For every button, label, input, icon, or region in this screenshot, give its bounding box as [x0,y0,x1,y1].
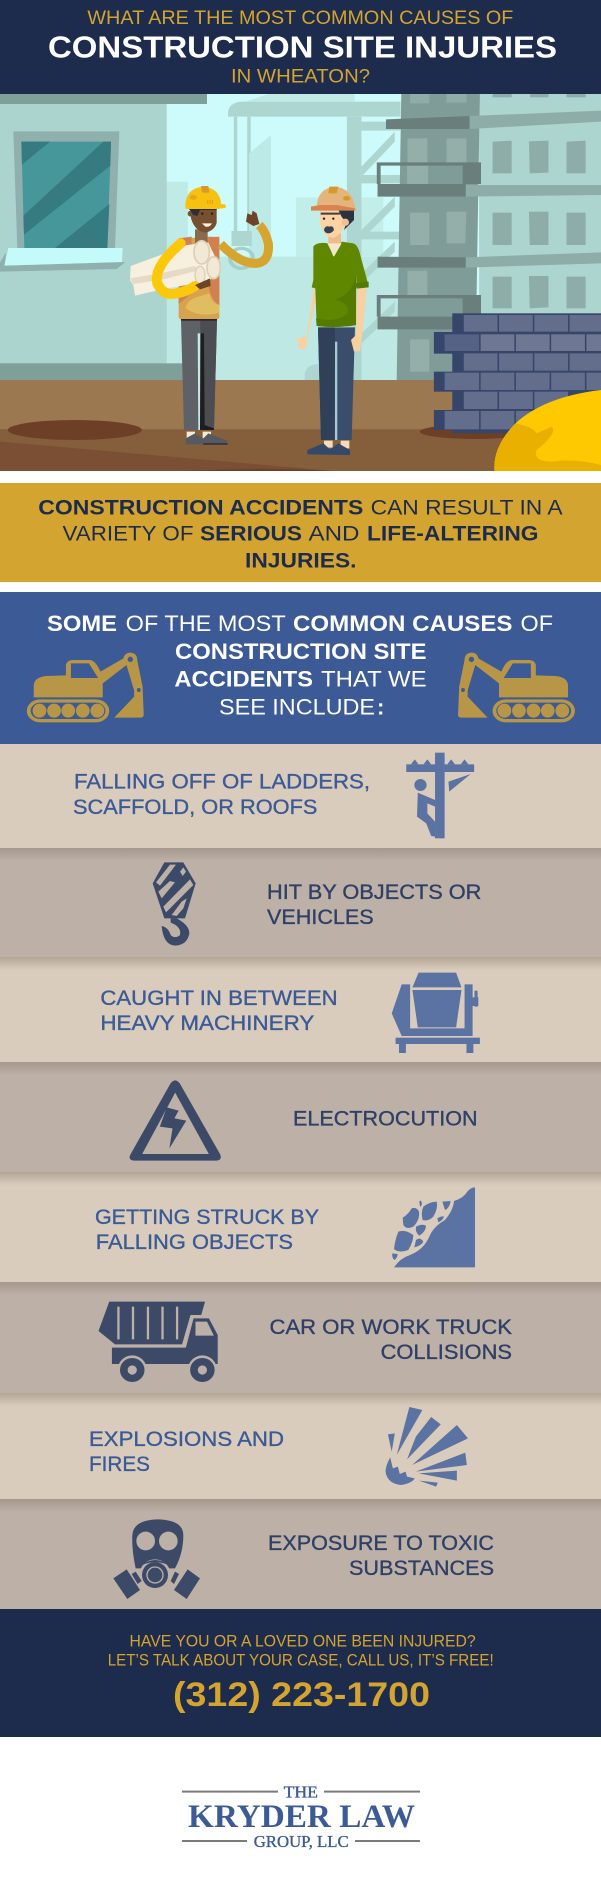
icon: electrical hazard triangle [130,1080,221,1161]
intro banner: gold: CONSTRUCTION ACCIDENTS [38,495,363,519]
panel: caught in machinery: HEAVY MACHINERY [100,1012,314,1035]
icon: crane hook [153,862,196,946]
section heading panel: blue: CONSTRUCTION SITE [175,639,426,664]
call to action footer: LET’S TALK ABOUT YOUR CASE, CALL US, IT’S FREE! [108,1652,494,1670]
call to action footer [0,1609,601,1737]
illustration: worker in green sweater [297,187,369,455]
panel: falling objects: FALLING OBJECTS [96,1231,293,1254]
panel: toxic substances: EXPOSURE TO TOXIC [268,1532,494,1555]
section heading panel: blue: SEE INCLUDE [219,694,375,719]
section heading panel: blue: : [377,694,384,719]
panel: falling off ladders: SCAFFOLD, OR ROOFS [73,796,317,819]
logo: The Kryder Law Group, LLC [182,1783,420,1851]
panel: toxic substances [0,1499,601,1609]
intro banner: gold: CAN RESULT IN A [371,495,563,519]
section heading panel: blue: COMMON CAUSES [293,611,512,636]
header: title [0,0,601,94]
panel: electrocution: ELECTROCUTION [293,1108,478,1131]
panel: truck collisions: COLLISIONS [381,1341,512,1364]
brick stack [434,313,601,433]
intro banner: gold: INJURIES. [245,549,356,573]
panel: falling off ladders: FALLING OFF OF LADDERS, [74,770,370,793]
logo: The Kryder Law Group, LLC: KRYDER LAW [188,1799,415,1835]
section heading panel: blue: SOME [47,611,117,636]
logo: The Kryder Law Group, LLC: THE [284,1783,318,1802]
panel: hit by objects: HIT BY OBJECTS OR [267,881,481,904]
icon: explosion burst [386,1407,468,1487]
icon: gas mask [113,1519,200,1599]
intro banner: gold: VARIETY OF [62,522,194,546]
ground [0,380,507,471]
icon: excavator left [29,653,144,721]
logo: The Kryder Law Group, LLC: GROUP, LLC [254,1832,349,1851]
section heading panel: blue: THAT WE [321,667,427,692]
panel: explosions and fires: EXPLOSIONS AND [89,1428,284,1451]
icon: dump truck [99,1302,218,1385]
sand pile [494,390,601,471]
call to action footer: (312) 223-1700 [173,1676,430,1714]
intro banner: gold: AND [308,522,360,546]
illustration: worker with hard hat and blueprints [130,186,269,445]
intro banner: gold [0,483,601,582]
header: title: CONSTRUCTION SITE INJURIES [48,29,557,64]
panel: truck collisions [0,1282,601,1393]
background crane and city [165,94,402,380]
panel: falling objects [0,1172,601,1282]
header: title: WHAT ARE THE MOST COMMON CAUSES OF [87,7,513,29]
illustration: building window [0,131,125,272]
icon: cement mixer [392,973,480,1053]
panel: caught in machinery [0,957,601,1062]
panel: hit by objects: VEHICLES [267,906,374,929]
panel: electrocution [0,1062,601,1172]
call to action footer: HAVE YOU OR A LOVED ONE BEEN INJURED? [130,1633,476,1651]
panel: falling objects: GETTING STRUCK BY [95,1206,319,1229]
section heading panel: blue [0,592,601,744]
intro banner: gold: LIFE-ALTERING [367,522,538,546]
section heading panel: blue: ACCIDENTS [174,667,313,692]
icon: excavator right [458,653,573,721]
panel: caught in machinery: CAUGHT IN BETWEEN [100,987,338,1010]
header: title: IN WHEATON? [231,66,370,88]
panel: falling off ladders [0,744,601,848]
left building [0,94,207,381]
section heading panel: blue: OF [520,611,553,636]
icon: rockfall [392,1187,475,1267]
panel: toxic substances: SUBSTANCES [349,1557,494,1580]
section heading panel: blue: OF THE MOST [126,611,286,636]
icon: worker on utility pole [406,753,474,838]
panel: explosions and fires [0,1393,601,1499]
intro banner: gold: SERIOUS [200,522,302,546]
panel: hit by objects [0,848,601,957]
panel: truck collisions: CAR OR WORK TRUCK [270,1316,512,1339]
panel: explosions and fires: FIRES [89,1453,150,1476]
illustration: construction site background [0,94,601,471]
right building and tower [377,94,601,381]
